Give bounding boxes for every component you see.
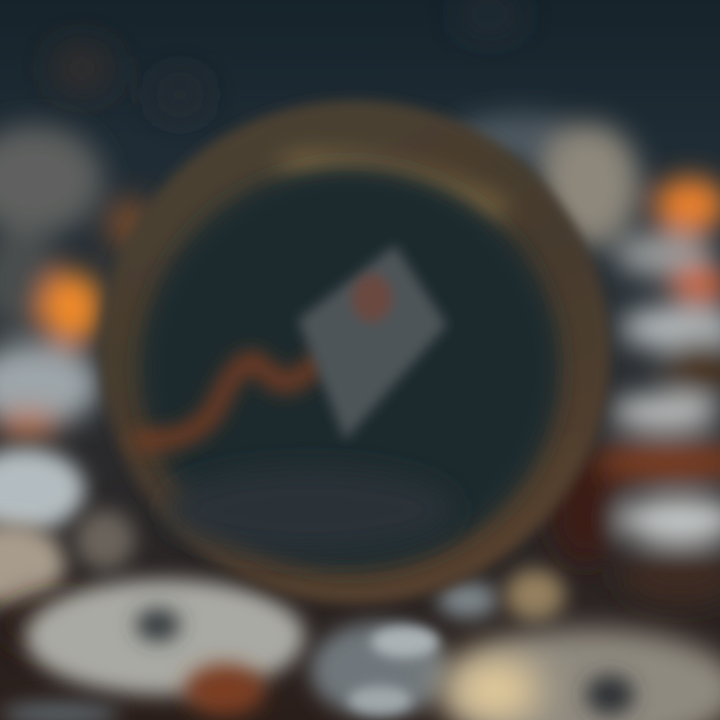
bottom left coins — [0, 448, 305, 720]
coin lower text band — [165, 468, 455, 552]
chart line — [140, 360, 320, 441]
bottom right coins — [310, 569, 720, 720]
left blurred coins — [0, 125, 154, 439]
coin rim gold highlight — [285, 171, 500, 218]
coin rim — [100, 100, 610, 604]
right blurred coins — [450, 114, 720, 605]
background glow spots — [56, 1, 520, 111]
diamond emblem — [298, 245, 447, 440]
main coin — [100, 100, 610, 604]
coin face — [140, 166, 560, 570]
